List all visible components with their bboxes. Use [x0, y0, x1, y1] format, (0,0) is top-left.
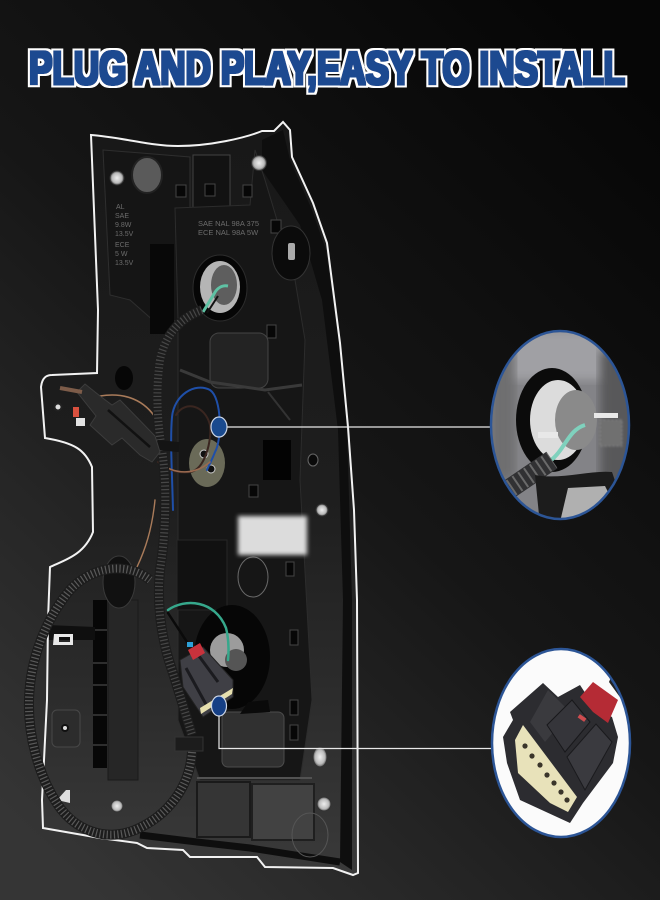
lens plug: [132, 157, 162, 193]
moulded markings: 5 W: [115, 251, 128, 258]
moulded markings: 9.8W: [115, 222, 132, 229]
moulded markings: 13.5V: [115, 260, 134, 267]
cable clip: [175, 737, 203, 751]
detail inset: connector: [492, 649, 632, 837]
housing body: [41, 122, 358, 875]
small square clips: [176, 184, 298, 740]
wires: [100, 388, 229, 660]
tape on cable: [157, 440, 179, 452]
connector pin holes: [522, 743, 570, 803]
upper bulb socket: [193, 255, 247, 321]
moulded markings: ECE NAL 98A 5W: [198, 228, 259, 237]
middle bulb socket: [189, 439, 225, 487]
blurred label: [238, 516, 307, 555]
callout line two: [219, 716, 491, 748]
moulded markings: SAE NAL 98A 375: [198, 219, 259, 228]
moulded markings: AL: [116, 204, 125, 211]
upper inline connector: [60, 384, 160, 462]
housing moulded details: [46, 130, 352, 870]
lower connector: [180, 642, 233, 717]
corrugated cables: [29, 310, 202, 835]
moulded markings: 13.5V: [115, 231, 134, 238]
screws: [110, 156, 331, 812]
mounting points: [54, 226, 318, 731]
moulded markings: SAE: [115, 213, 129, 220]
moulded markings: [115, 204, 259, 267]
tail light rear housing: [29, 122, 358, 875]
callout line one: [227, 426, 491, 428]
callout dot two: [212, 696, 226, 716]
ellipse embossing: [238, 557, 268, 597]
outline: [41, 122, 358, 875]
callout dot one: [211, 417, 227, 437]
slots: [53, 634, 73, 645]
lower bulb socket: [194, 605, 270, 714]
moulded markings: ECE: [115, 242, 130, 249]
detail inset: bulb socket: [491, 330, 640, 525]
